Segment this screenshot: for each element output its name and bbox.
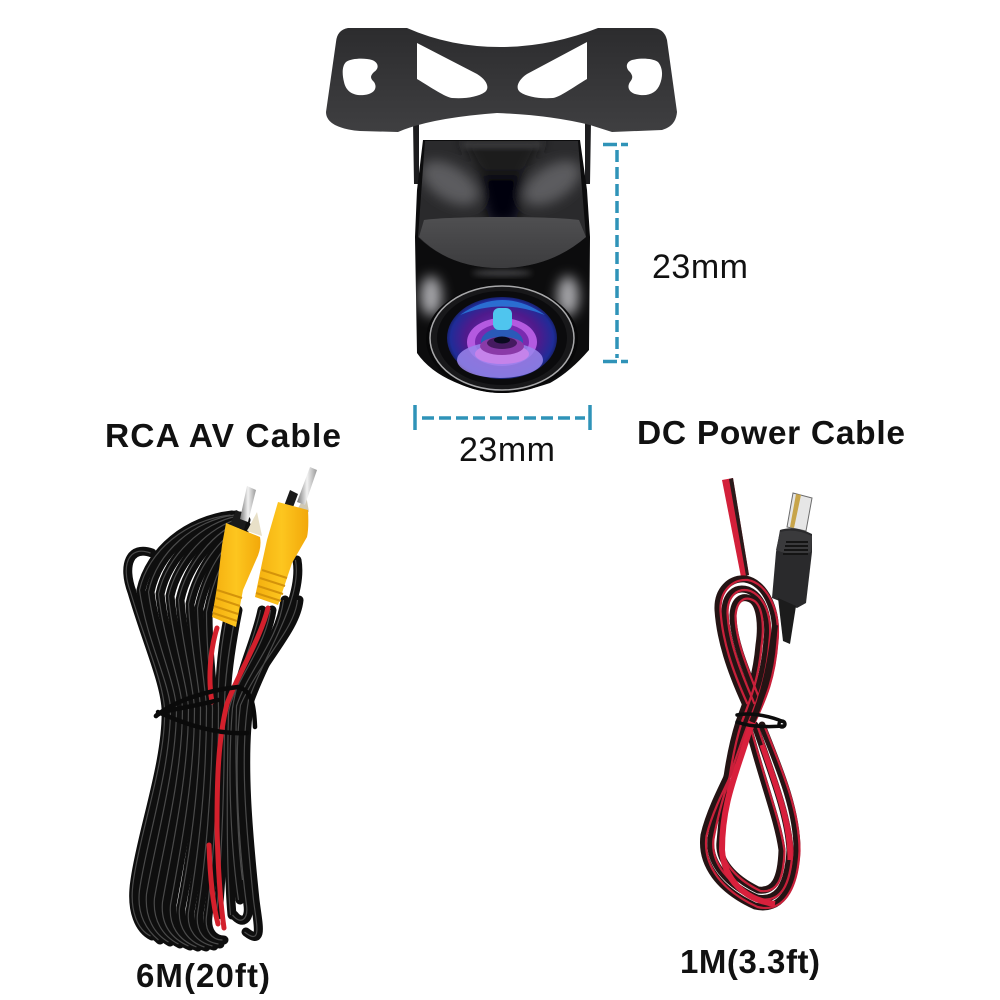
cable tie (156, 687, 255, 733)
heading: DC Power Cable: DC Power Cable (637, 415, 905, 452)
lens glass (447, 297, 557, 379)
DC power cable photo (703, 478, 812, 908)
camera body (415, 140, 590, 393)
lens housing ring (426, 285, 578, 393)
heading: RCA AV Cable: RCA AV Cable (105, 418, 341, 455)
left yellow RCA plug (212, 523, 260, 627)
mounting bracket legs (413, 122, 591, 184)
panel: camera product photo (326, 28, 677, 393)
DC cable tie (737, 714, 785, 727)
mounting bracket plate (326, 28, 677, 132)
lens reflections (467, 318, 537, 366)
DC jack metal tip (787, 493, 812, 531)
dimension: horizontal 23mm bracket (415, 405, 590, 430)
body panel reflections (422, 142, 582, 217)
label: vertical dimension: 23mm (652, 248, 748, 286)
length label: DC cable: 1M(3.3ft) (680, 943, 820, 980)
black wire bundle (126, 515, 299, 947)
left RCA plug pin (230, 486, 262, 536)
label: horizontal dimension: 23mm (459, 431, 555, 469)
stripped wire end (722, 478, 749, 577)
body upper panel (418, 141, 586, 268)
body highlights (420, 270, 579, 316)
right yellow RCA plug (255, 502, 308, 605)
right RCA plug pin (284, 467, 317, 512)
dimension: vertical 23mm bracket (603, 144, 628, 362)
DC jack body (772, 528, 812, 644)
body hood lower panel (419, 217, 586, 268)
length label: RCA cable: 6M(20ft) (136, 957, 270, 994)
DC wire loop (703, 579, 800, 908)
red wires (209, 608, 268, 928)
RCA AV cable photo (126, 467, 317, 947)
